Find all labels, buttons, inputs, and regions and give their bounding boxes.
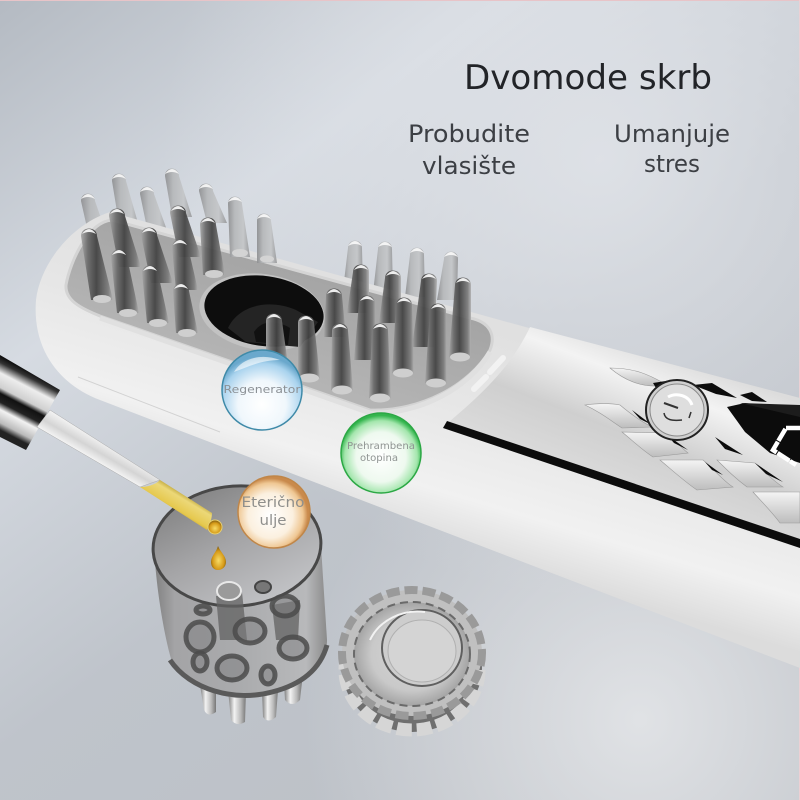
text: Umanjuje stres	[614, 120, 730, 178]
dropper: glass tube	[37, 410, 160, 487]
brush: short rear bristles by the opening	[228, 196, 277, 263]
cap: bristle cartridge lid	[342, 590, 482, 732]
brush: lower rim over bristle bases	[100, 318, 490, 413]
bubble: Etericno ulje	[238, 476, 310, 548]
falling oil drop	[211, 546, 226, 570]
bubble: Prehrambena otopina: Prehrambena	[347, 441, 415, 452]
bubble: Prehrambena otopina: otopina	[360, 453, 398, 464]
dropper: metal collar	[0, 355, 60, 450]
brush: silver control panel	[443, 327, 800, 548]
oil droplet at tip	[208, 520, 222, 534]
panel: dark reflections	[632, 380, 800, 482]
brush: rear bristle row, left	[81, 168, 227, 250]
title: Dvomode skrb	[464, 58, 712, 98]
brush: rear bristle row, right	[343, 240, 458, 300]
panel: diamond pattern	[585, 368, 800, 523]
text: Probudite vlasiste: Probudite	[408, 120, 530, 148]
brush: front bristles, right cluster	[266, 264, 471, 402]
brush: recessed bristle tray	[66, 220, 492, 410]
text: Umanjuje stres: Umanjuje	[614, 120, 730, 148]
text: Probudite vlasiste	[408, 120, 530, 180]
brush: central dark opening	[194, 266, 330, 358]
bubble: Regenerator	[222, 350, 302, 430]
text: Probudite vlasiste: vlasište	[422, 152, 516, 180]
dropper: oil in tip	[140, 480, 212, 530]
cylinder: bristles below cartridge	[200, 682, 302, 724]
bubble: Regenerator: Regenerator	[224, 383, 301, 396]
bubble: Etericno ulje: ulje	[260, 513, 286, 529]
bubble: Etericno ulje: Eterično	[242, 495, 304, 511]
icon: power button	[646, 380, 708, 440]
icon: digital display digit	[773, 428, 800, 465]
text: Umanjuje stres: stres	[644, 150, 700, 178]
brush: front bristles, left cluster	[81, 206, 225, 337]
brush: white handle body	[36, 212, 800, 668]
bubble: Prehrambena otopina	[341, 413, 421, 493]
cylinder: bristle cartridge	[149, 480, 327, 698]
cylinder: bristles seen through cartridge	[186, 581, 307, 684]
